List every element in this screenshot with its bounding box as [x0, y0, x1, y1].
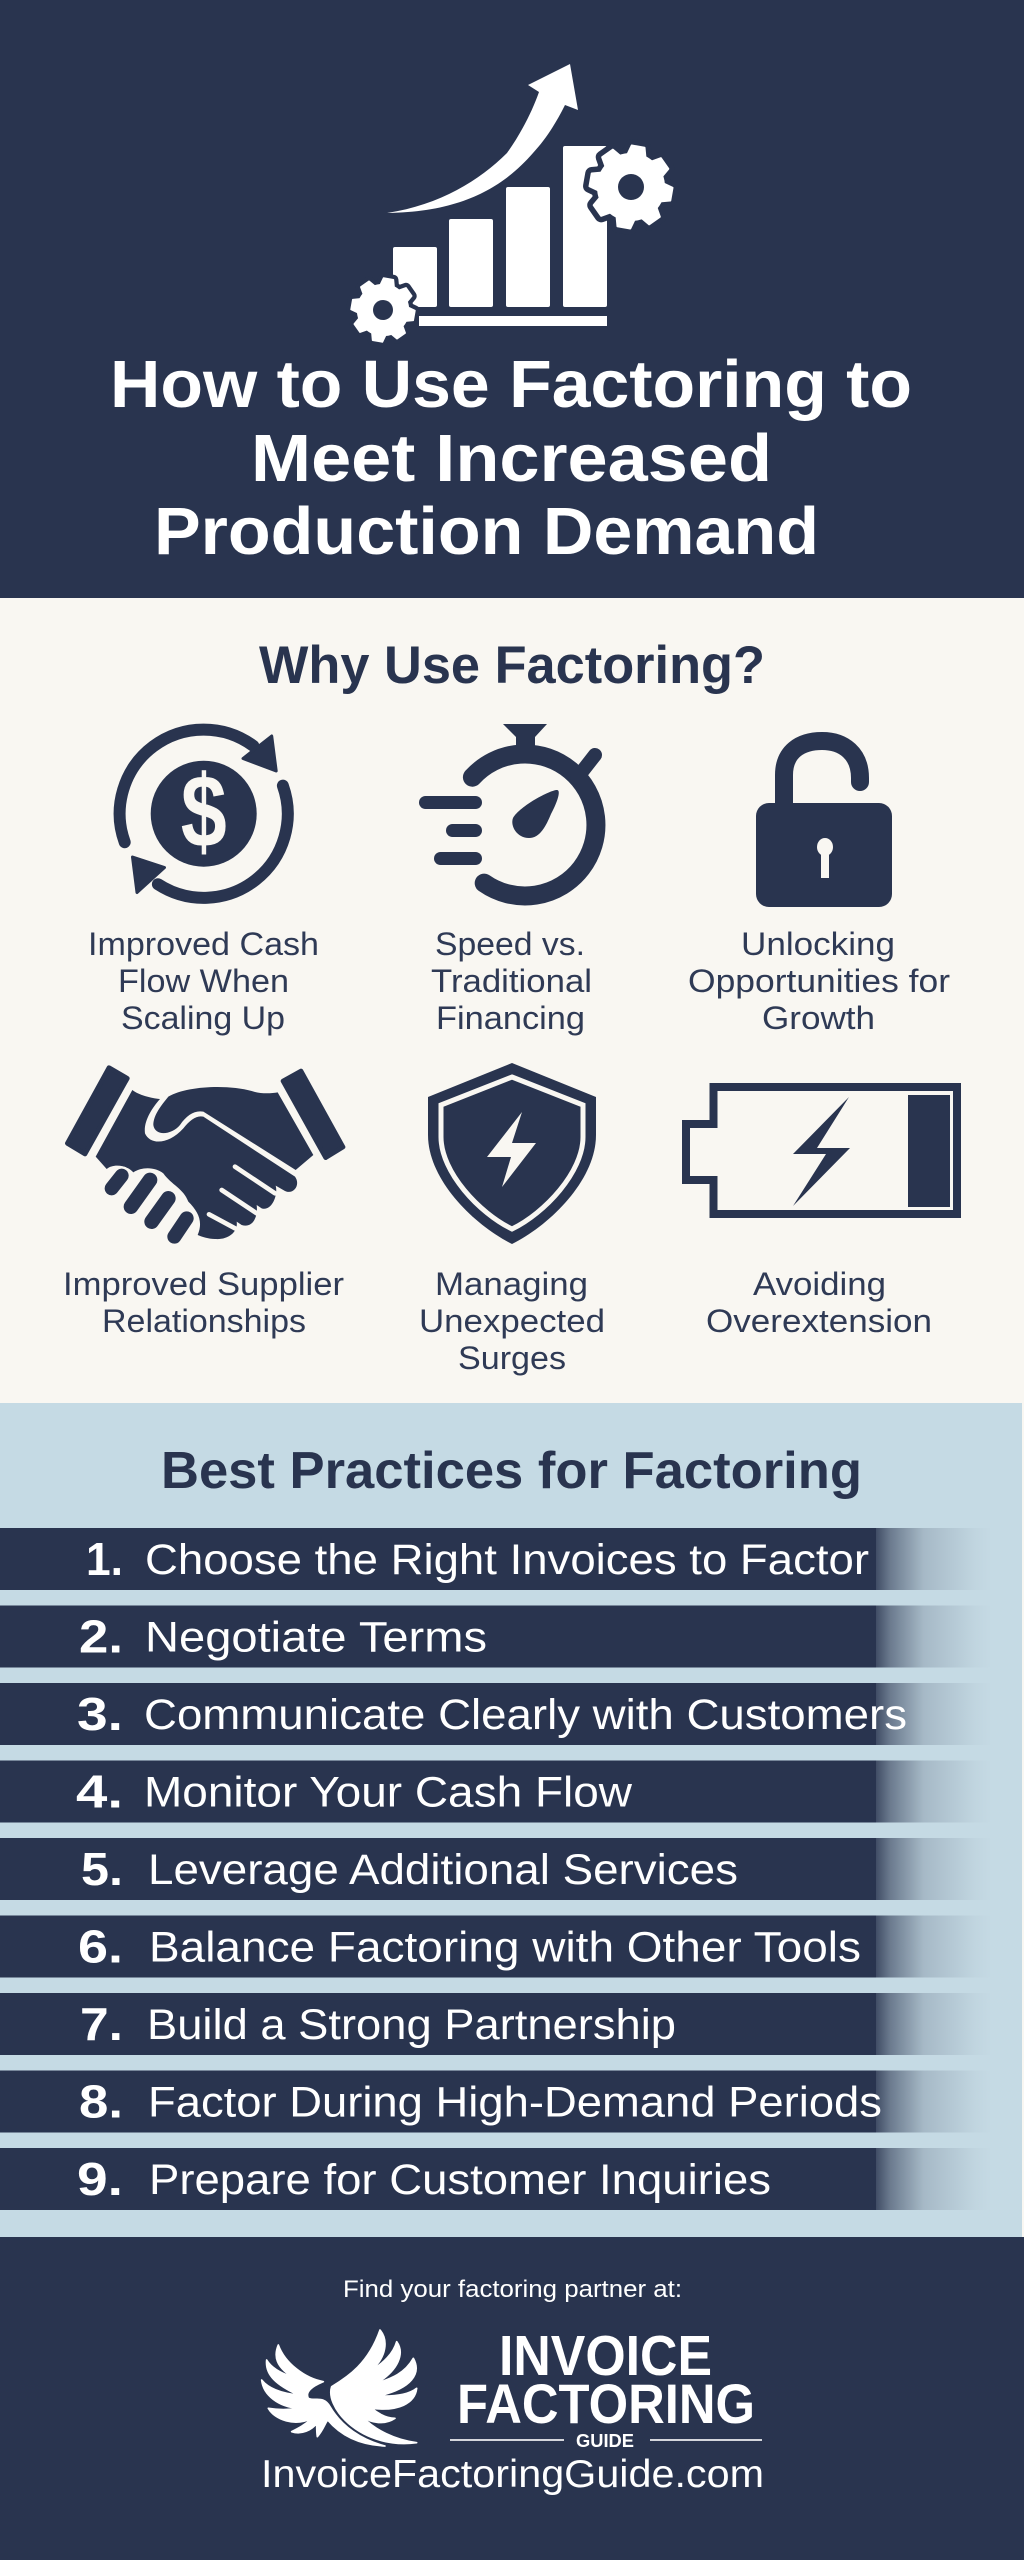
title: Production Demand: [154, 494, 819, 569]
list item 8: [0, 2070, 992, 2132]
icon: shield with bolt: [428, 1063, 596, 1244]
icon: growth chart with gears: [351, 64, 673, 342]
logo wordmark: [450, 2324, 762, 2451]
text: website: InvoiceFactoringGuide.com: [261, 2453, 764, 2496]
heading: why use factoring: Why Use Factoring?: [259, 636, 765, 695]
label: managing unexpected surges: Managing: [435, 1266, 588, 1302]
logo wordmark: FACTORING: [457, 2372, 755, 2435]
label: improved cash flow: Flow When: [118, 963, 289, 999]
list item 8: 8.: [79, 2076, 123, 2128]
label: speed: Speed vs.: [435, 926, 585, 962]
list item 5: Leverage Additional Services: [148, 1846, 738, 1894]
list item 9: Prepare for Customer Inquiries: [149, 2156, 771, 2204]
logo wordmark: INVOICE: [499, 2324, 712, 2388]
list item 9: [0, 2148, 992, 2210]
list item 9: 9.: [77, 2153, 123, 2205]
title: Meet Increased: [251, 421, 772, 496]
list item 3: 3.: [77, 1688, 123, 1740]
list item 7: Build a Strong Partnership: [147, 2001, 676, 2049]
icon: handshake: [67, 1068, 343, 1239]
icon: battery: [686, 1087, 957, 1214]
label: speed: Financing: [436, 1000, 585, 1036]
label: managing unexpected surges: Surges: [458, 1340, 566, 1376]
label: unlocking opportunities: Unlocking: [741, 926, 895, 962]
text: find your partner: Find your factoring partner at:: [343, 2276, 682, 2303]
list item 2: [0, 1606, 992, 1668]
list item 5: [0, 1838, 992, 1900]
label: avoiding overextension: Avoiding: [753, 1266, 886, 1302]
label: managing unexpected surges: [419, 1266, 605, 1376]
panel: why use factoring: [0, 598, 1024, 1404]
list item 6: [0, 1916, 992, 1978]
label: managing unexpected surges: Unexpected: [419, 1303, 605, 1339]
label: improved cash flow: [88, 926, 319, 1036]
icon: open padlock: [756, 741, 892, 907]
list item 4: Monitor Your Cash Flow: [144, 1768, 633, 1816]
list item 1: [0, 1528, 992, 1590]
label: unlocking opportunities: [688, 926, 950, 1036]
list item 7: [0, 1993, 992, 2055]
list item 4: 4.: [76, 1766, 123, 1818]
list item 3: [0, 1683, 992, 1745]
icon: stopwatch: [419, 724, 596, 896]
icon: eagle logo: [262, 2330, 417, 2446]
panel: best practices: [0, 1403, 1022, 2237]
list item 5: 5.: [81, 1843, 123, 1895]
title: [110, 347, 912, 569]
list item 3: Communicate Clearly with Customers: [144, 1691, 907, 1739]
list item 6: Balance Factoring with Other Tools: [149, 1924, 861, 1972]
logo wordmark: GUIDE: [576, 2431, 634, 2451]
list item 1: Choose the Right Invoices to Factor: [145, 1536, 869, 1584]
panel: header: [0, 0, 1024, 598]
list item 2: Negotiate Terms: [145, 1614, 487, 1662]
label: speed: [431, 926, 592, 1036]
list item 8: Factor During High-Demand Periods: [148, 2078, 882, 2126]
label: improved supplier relationships: Relationships: [102, 1303, 306, 1339]
label: improved supplier relationships: Improved Supplier: [63, 1266, 344, 1302]
list item 2: 2.: [79, 1610, 123, 1662]
label: unlocking opportunities: Opportunities for: [688, 963, 950, 999]
icon: cash flow: [120, 730, 288, 898]
label: improved supplier relationships: [63, 1266, 344, 1339]
label: unlocking opportunities: Growth: [762, 1000, 875, 1036]
label: speed: Traditional: [431, 963, 592, 999]
title: How to Use Factoring to: [110, 347, 912, 422]
panel: footer: [0, 2237, 1024, 2560]
icon: cash flow: $: [181, 754, 227, 869]
list item 6: 6.: [78, 1920, 123, 1972]
list item 1: 1.: [86, 1533, 123, 1585]
label: improved cash flow: Improved Cash: [88, 926, 319, 962]
label: avoiding overextension: [706, 1266, 932, 1339]
list item 7: 7.: [80, 1998, 123, 2050]
label: improved cash flow: Scaling Up: [121, 1000, 285, 1036]
list item 4: [0, 1760, 992, 1822]
label: avoiding overextension: Overextension: [706, 1303, 932, 1339]
heading: best practices: Best Practices for Factoring: [161, 1442, 862, 1500]
